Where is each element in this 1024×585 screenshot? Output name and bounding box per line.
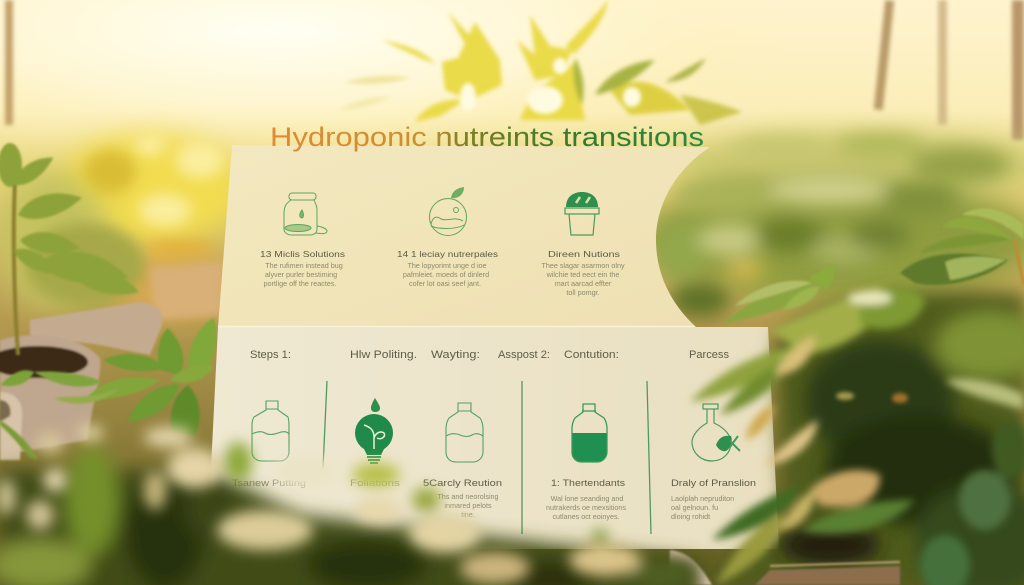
foreground foliage: right plant (668, 208, 1024, 585)
dividers (323, 381, 651, 534)
caption: Tsanew Putting (232, 478, 306, 489)
description: inmared pelots (444, 501, 492, 510)
description: Thee slagar asarmon olny (541, 261, 625, 270)
column: direen nutions (541, 192, 625, 297)
column: step bottle 2 (423, 403, 502, 519)
background plant: top yellow seedling (340, 0, 742, 125)
description: The lopyorimt unge d ioe (407, 261, 487, 270)
description: Ths and neorolsing (437, 492, 499, 501)
description: cutlanes oct eoinyes. (552, 512, 620, 521)
icon: bottle (252, 401, 289, 461)
step headings row (250, 349, 729, 361)
description (264, 261, 343, 288)
description: tine. (461, 510, 475, 519)
caption: 5Carcly Reution (423, 478, 502, 489)
step headings row: Contution: (564, 349, 619, 361)
description: alyver purler bestiming (265, 270, 337, 279)
description: oal gelnoun. fu (671, 503, 718, 512)
description: wilchie ted eect ein the (546, 270, 619, 279)
description: mart aarcad effter (555, 279, 612, 288)
description (437, 492, 499, 519)
sunlit gaps in seedling (460, 58, 641, 114)
column: step filled bottle (546, 404, 626, 521)
column: step bottle 1 (232, 401, 306, 489)
step headings row: Hlw Politing. (350, 349, 417, 361)
title: Hydroponic nutreints transitions (270, 122, 704, 152)
icon: potted plant (565, 192, 599, 235)
flower pot foreground (668, 550, 900, 585)
right distant leaves (660, 133, 1010, 318)
dark mass (690, 292, 1024, 585)
column: lightbulb icon (350, 398, 400, 489)
background plant: left pots (0, 143, 222, 460)
heading: 13 Miclis Solutions (260, 250, 345, 259)
column: micro solutions (260, 193, 345, 288)
icon: flask with leaf (692, 404, 740, 461)
blurred foreground leaves (690, 285, 1024, 585)
description: dloing rohidt (671, 512, 710, 521)
icon: jar (284, 193, 327, 235)
icon: sprout bulb with drop (355, 398, 393, 463)
column: step flask (671, 404, 756, 521)
step headings row: Steps 1: (250, 349, 291, 361)
sharp leaves (723, 208, 1024, 323)
description (671, 494, 734, 521)
icon: round nutrient with leaf (430, 187, 466, 236)
card upper section (218, 145, 710, 327)
icon: bottle (446, 403, 483, 462)
column: lecioy nutrerpales (397, 187, 498, 288)
step headings row: Wayting: (431, 349, 480, 361)
description: cofer lot oasi seef jant. (409, 279, 481, 288)
heading: Direen Nutions (548, 250, 620, 259)
description: The rufimen instead bug (265, 261, 343, 270)
caption: 1: Thertendants (551, 478, 625, 489)
icon: filled bottle (572, 404, 607, 462)
step headings row: Parcess (689, 349, 729, 361)
description: portlige off the reactes. (264, 279, 336, 288)
card lower section (207, 327, 779, 549)
heading: 14 1 leciay nutrerpales (397, 250, 498, 259)
caption: Draly of Pranslion (671, 478, 756, 489)
description: Laolplah nepruditon (671, 494, 734, 503)
description: pafmleiet. moeds of dinlerd (403, 270, 489, 279)
step headings row: Asspost 2: (498, 349, 550, 361)
description: Wal lone seanding and (551, 494, 623, 503)
panel: infographic card (207, 122, 779, 549)
description: nutrakerds oe mexsitions (546, 503, 626, 512)
description (541, 261, 625, 297)
caption: Foliations (350, 478, 400, 489)
description (546, 494, 626, 521)
foreground foliage: bottom blurred leaves (0, 425, 700, 585)
description: toll pomgr. (566, 288, 600, 297)
description (403, 261, 489, 288)
